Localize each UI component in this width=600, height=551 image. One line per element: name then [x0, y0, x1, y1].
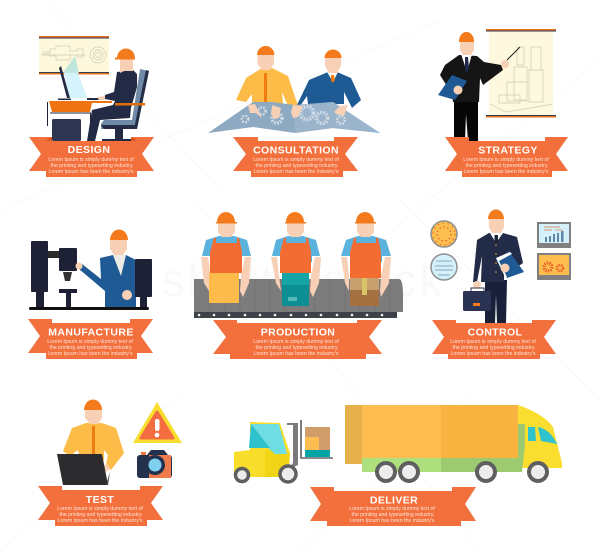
panel: consultation: [208, 46, 380, 177]
text: design description: the printing and typesetting industry.: [51, 163, 133, 169]
text: consultation description: Lorem Ipsum has been the industry's: [254, 169, 339, 175]
text: strategy description: Lorem Ipsum is simply dummy text of: [463, 157, 549, 163]
heading: control: CONTROL: [468, 326, 523, 338]
icon: laptop: [57, 454, 110, 485]
icon: target dial: [431, 221, 457, 247]
text: control description: Lorem Ipsum has been the industry's: [451, 351, 536, 357]
panel: strategy: [438, 29, 568, 177]
figure: worker with teal box: [271, 212, 321, 306]
panel: test: [38, 400, 182, 526]
text: design description: Lorem Ipsum has been the industry's: [49, 169, 134, 175]
heading: production: PRODUCTION: [261, 326, 335, 338]
text: test description: Lorem Ipsum has been the industry's: [58, 518, 143, 524]
figure: worker with brown box: [341, 212, 391, 306]
panel: design: [29, 36, 154, 177]
text: consultation description: the printing and typesetting industry.: [256, 163, 338, 169]
panel: deliver: [234, 405, 562, 526]
ribbon: manufacture: [28, 319, 153, 359]
icon: warning triangle: [133, 402, 182, 443]
heading: strategy: STRATEGY: [478, 144, 538, 156]
text: manufacture description: the printing and typesetting industry.: [50, 345, 132, 351]
icon: machine: [29, 241, 149, 310]
icon: camera: [137, 450, 172, 478]
text: control description: Lorem Ipsum is simply dummy text of: [450, 339, 536, 345]
text: design description: Lorem Ipsum is simply dummy text of: [48, 157, 134, 163]
heading: design: DESIGN: [68, 144, 110, 156]
figure: inspector: [463, 210, 524, 323]
icon: design board: [39, 36, 109, 74]
heading: deliver: DELIVER: [370, 494, 418, 506]
text: deliver description: Lorem Ipsum has been the industry's: [350, 518, 435, 524]
figure: engineer in blue suit: [297, 50, 361, 108]
panel: control: [431, 210, 571, 359]
text: consultation description: Lorem Ipsum is simply dummy text of: [253, 157, 339, 163]
chart board with city drawing: [486, 29, 556, 118]
icon: forklift: [234, 420, 333, 482]
text: production description: Lorem Ipsum is simply dummy text of: [253, 339, 339, 345]
icon: blue book: [438, 75, 467, 100]
icon: monitor: [58, 56, 87, 100]
ribbon: test: [38, 486, 163, 526]
heading: consultation: CONSULTATION: [253, 144, 339, 156]
icon: delivery truck: [345, 405, 562, 481]
text: strategy description: Lorem Ipsum has been the industry's: [464, 169, 549, 175]
figure: engineer in yellow shirt: [236, 46, 298, 108]
ribbon: design: [29, 137, 154, 177]
icon: blue folder: [496, 251, 524, 278]
text: control description: the printing and typesetting industry.: [453, 345, 535, 351]
text: deliver description: the printing and typesetting industry.: [352, 512, 434, 518]
watermark: shutterstock: [162, 254, 443, 306]
ribbon: deliver: [310, 487, 476, 526]
text: strategy description: the printing and typesetting industry.: [466, 163, 548, 169]
text: production description: the printing and typesetting industry.: [256, 345, 338, 351]
figure: presenter: [438, 32, 520, 141]
ribbon: production: [213, 320, 382, 359]
text: deliver description: Lorem Ipsum is simply dummy text of: [349, 506, 435, 512]
panel: manufacture: [28, 230, 153, 359]
ribbon: control: [432, 320, 556, 359]
conveyor belt: [194, 279, 403, 318]
text: manufacture description: Lorem Ipsum is simply dummy text of: [47, 339, 133, 345]
text: test description: the printing and typesetting industry.: [60, 512, 142, 518]
heading: test: TEST: [86, 494, 114, 506]
icon: chart screen: [537, 222, 571, 248]
icon: desk and computer: [48, 98, 112, 141]
icon: gears screen: [537, 253, 571, 280]
hands on the map: [248, 104, 348, 119]
text: test description: Lorem Ipsum is simply dummy text of: [57, 506, 143, 512]
heading: manufacture: MANUFACTURE: [48, 326, 134, 338]
text: production description: Lorem Ipsum has been the industry's: [254, 351, 339, 357]
figure: operator: [76, 230, 152, 307]
panel: production: [194, 212, 403, 359]
ribbon: consultation: [233, 137, 358, 177]
ribbon: strategy: [445, 137, 568, 177]
figure: worker with yellow box: [201, 212, 251, 303]
figure: seated designer: [87, 48, 149, 141]
figure: tester: [63, 400, 124, 472]
icon: briefcase: [463, 288, 491, 311]
icon: list dial: [431, 254, 457, 280]
text: manufacture description: Lorem Ipsum has been the industry's: [48, 351, 133, 357]
map with gears: [208, 102, 380, 133]
